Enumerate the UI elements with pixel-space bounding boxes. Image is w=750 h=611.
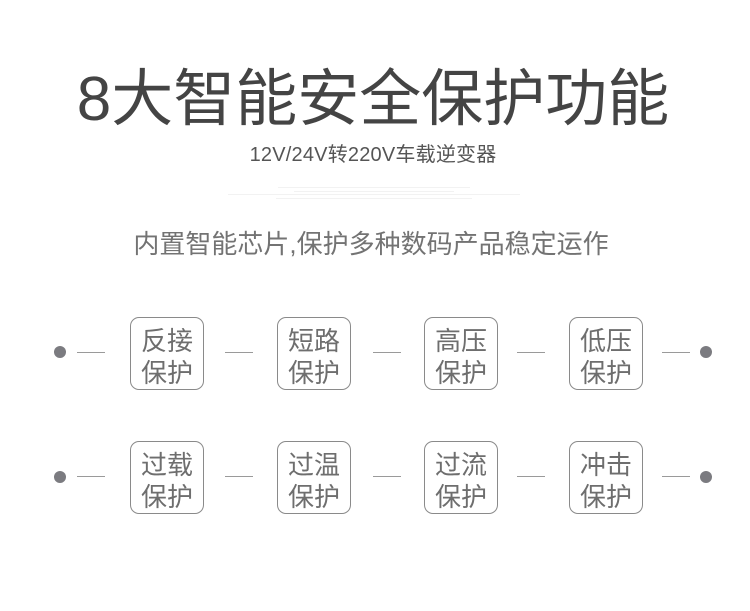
protection row 1 [54,317,712,390]
connector [225,352,253,353]
left dot [54,346,66,358]
right dot [700,471,712,483]
connector [373,476,401,477]
box: short circuit protection [277,317,351,390]
box: reverse protection [130,317,204,390]
connector [517,352,545,353]
subtitle: 12V/24V转220V车载逆变器 [250,144,496,166]
connector [662,352,690,353]
connector [77,476,105,477]
box: over current protection: 保护 [435,482,487,512]
box: reverse protection: 保护 [141,358,193,388]
box: high voltage protection [424,317,498,390]
box: short circuit protection: 保护 [288,358,340,388]
connector [77,352,105,353]
box: overload protection [130,441,204,514]
connector [662,476,690,477]
box: over temperature protection: 保护 [288,482,340,512]
connector [225,476,253,477]
right dot [700,346,712,358]
box: surge protection: 冲击 [580,450,632,480]
title: 8大智能安全保护功能 [77,65,669,134]
connector [517,476,545,477]
description text: 内置智能芯片,保护多种数码产品稳定运作 [133,229,609,259]
box: short circuit protection: 短路 [288,326,340,356]
box: over current protection: 过流 [435,450,487,480]
box: low voltage protection: 保护 [580,358,632,388]
box: overload protection: 保护 [141,482,193,512]
box: surge protection: 保护 [580,482,632,512]
box: over temperature protection: 过温 [288,450,340,480]
box: over current protection [424,441,498,514]
decorative fine print lines [228,187,520,199]
box: over temperature protection [277,441,351,514]
box: high voltage protection: 高压 [435,326,487,356]
box: reverse protection: 反接 [141,326,193,356]
box: high voltage protection: 保护 [435,358,487,388]
box: low voltage protection [569,317,643,390]
connector [373,352,401,353]
box: low voltage protection: 低压 [580,326,632,356]
box: surge protection [569,441,643,514]
box: overload protection: 过载 [141,450,193,480]
protection row 2 [54,441,712,514]
left dot [54,471,66,483]
